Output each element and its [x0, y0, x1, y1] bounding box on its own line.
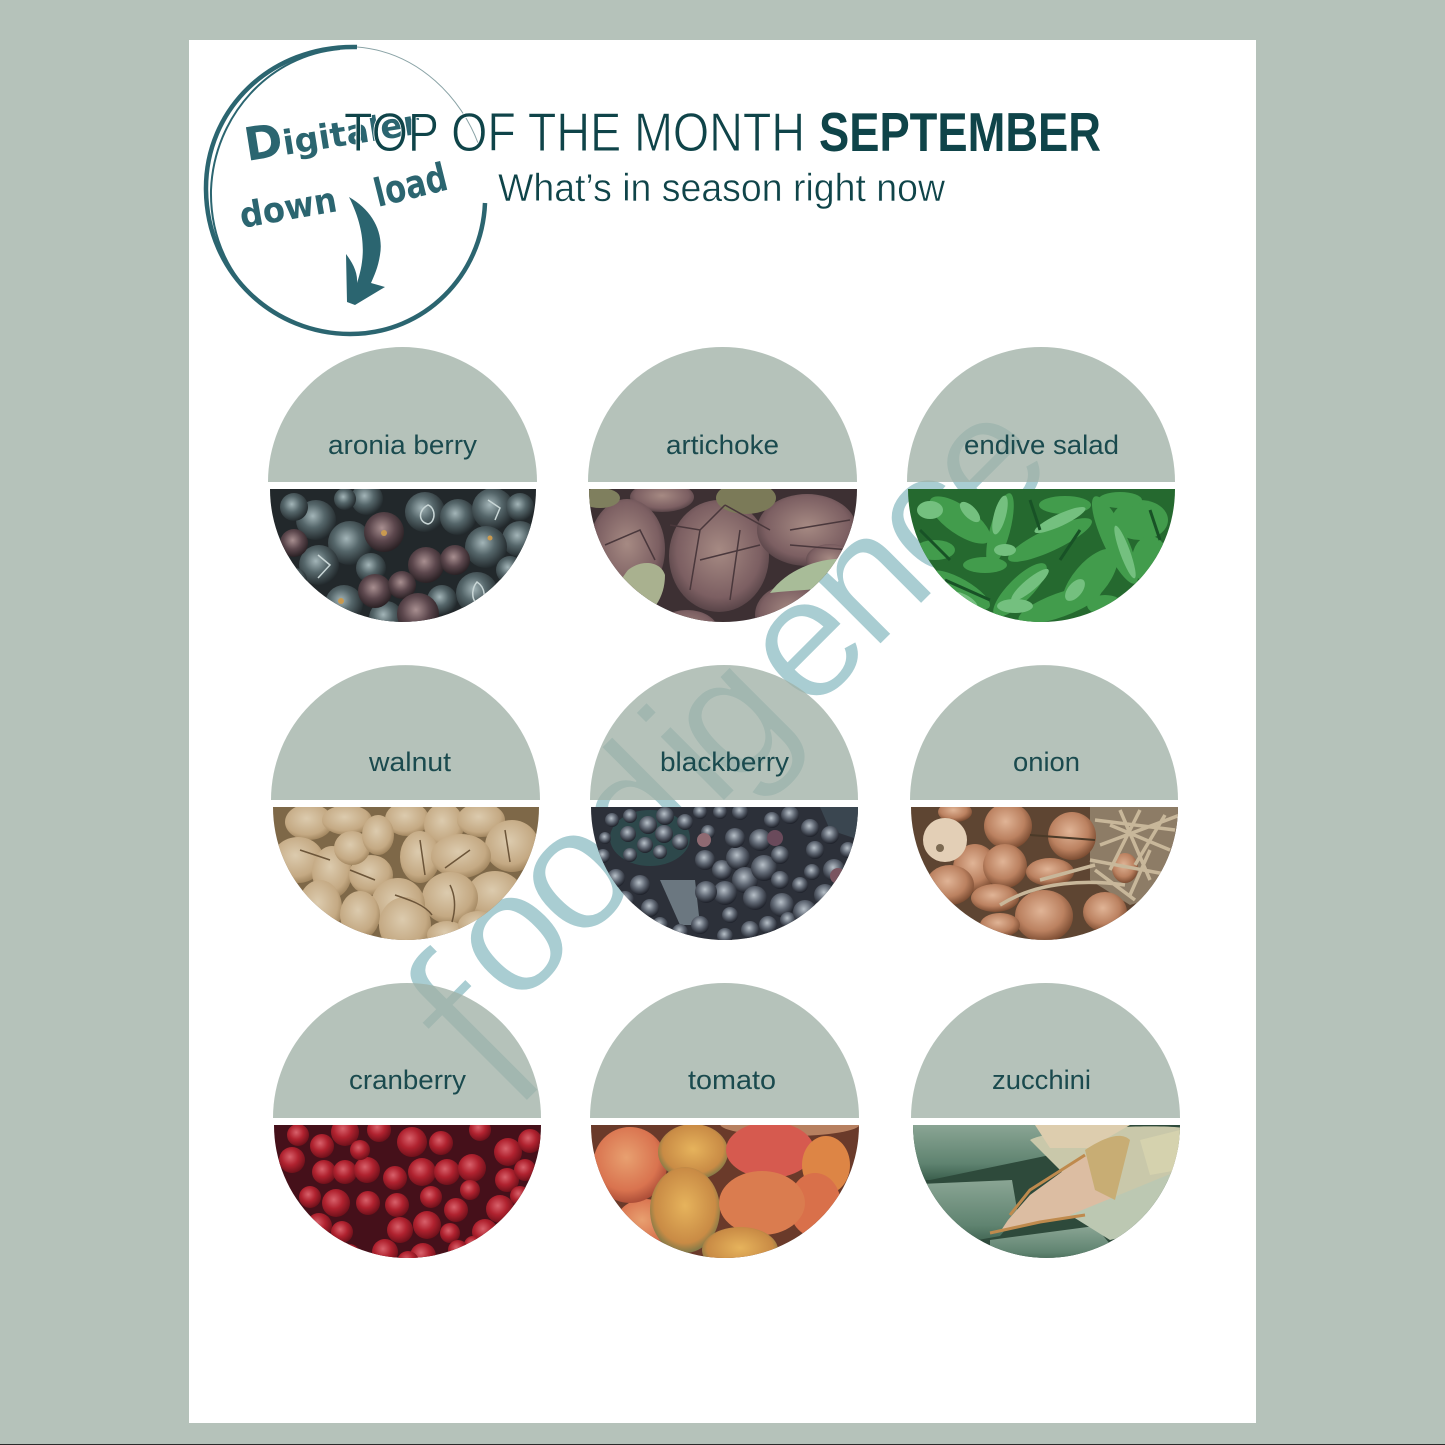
photo: blackberries — [589, 804, 860, 944]
label: aronia berry — [328, 430, 478, 460]
subtitle: What’s in season right now — [498, 167, 946, 210]
logo arrow — [346, 197, 385, 305]
panel: walnut — [271, 665, 541, 953]
logo text — [237, 91, 452, 237]
white page panel — [189, 40, 1256, 1423]
photo: zucchini — [910, 1125, 1190, 1264]
watermark: foodigence: f — [345, 905, 601, 1161]
logo badge: digital download — [206, 47, 485, 334]
header semicircle — [590, 983, 859, 1118]
photo: tomatoes — [591, 1125, 859, 1258]
header semicircle — [911, 983, 1180, 1118]
label: walnut — [368, 747, 452, 777]
label: endive salad — [964, 430, 1119, 460]
title: SEPTEMBER — [819, 101, 1101, 163]
header semicircle — [590, 665, 858, 800]
photo: walnuts — [273, 807, 539, 940]
label: onion — [1013, 747, 1080, 777]
title: TOP OF THE MONTH — [344, 101, 805, 163]
photo: aronia berries — [270, 489, 536, 622]
photo: artichokes — [589, 489, 857, 622]
header semicircle — [907, 347, 1175, 482]
header semicircle — [910, 665, 1178, 800]
logo text: down — [237, 180, 340, 237]
panel: artichoke — [588, 347, 857, 622]
label: tomato — [688, 1065, 776, 1095]
label: cranberry — [349, 1065, 467, 1095]
panel: aronia berry — [268, 347, 538, 635]
photo: onions — [910, 802, 1180, 942]
header semicircle — [273, 983, 541, 1118]
label: artichoke — [666, 430, 779, 460]
label: blackberry — [660, 747, 790, 777]
logo text: load — [370, 155, 452, 217]
logo text: Digitaler — [240, 91, 423, 172]
panel: blackberry — [589, 665, 860, 944]
photo: endive — [905, 488, 1177, 631]
panel: cranberry — [273, 983, 543, 1273]
header semicircle — [588, 347, 857, 482]
header semicircle — [268, 347, 537, 482]
watermark: foodigence: oodigence — [405, 357, 1085, 1036]
header semicircle — [271, 665, 540, 800]
panel: onion — [910, 665, 1180, 942]
photo: cranberries — [274, 1125, 541, 1258]
panel: zucchini — [910, 983, 1190, 1264]
panel: tomato — [590, 983, 860, 1273]
panel: endive salad — [905, 347, 1177, 631]
label: zucchini — [992, 1065, 1091, 1095]
